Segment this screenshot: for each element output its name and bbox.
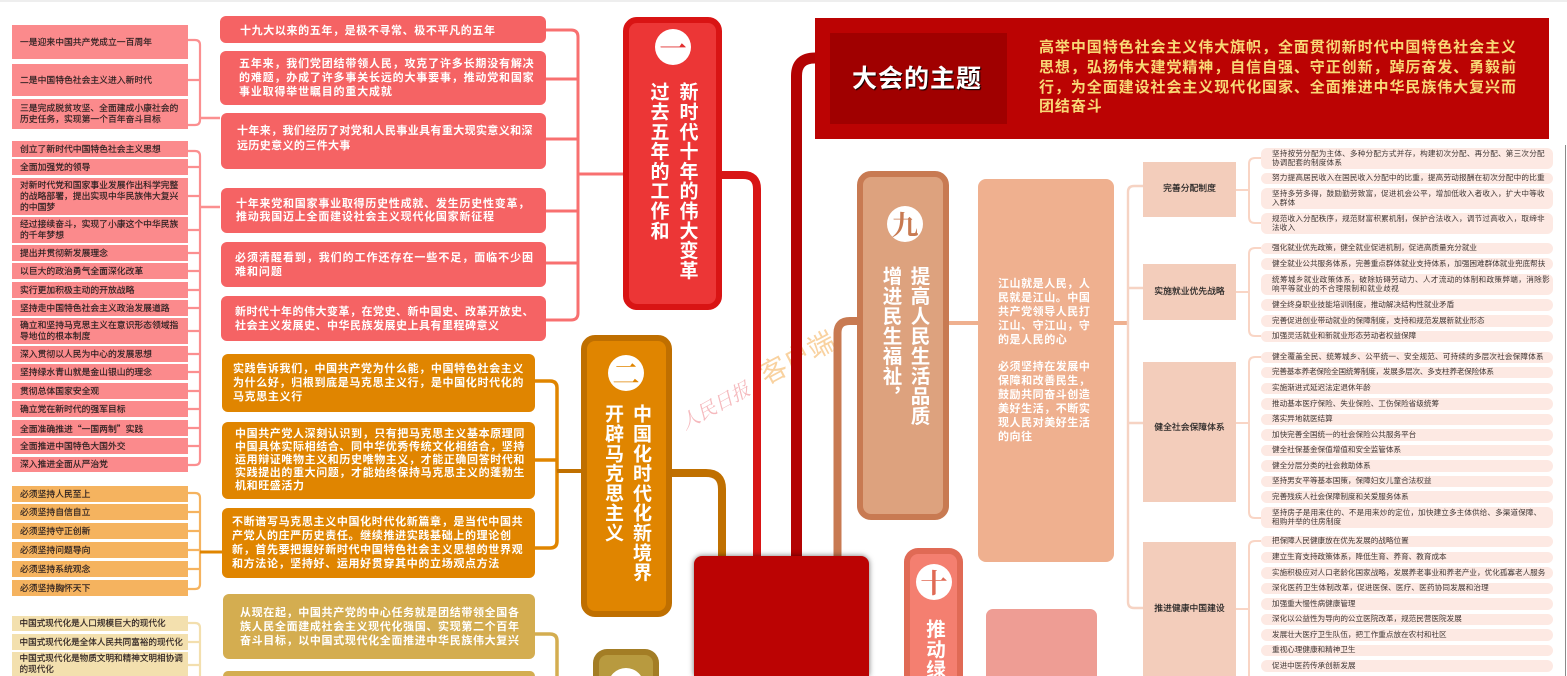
item: 完善基本养老保险全国统筹制度，发展多层次、多支柱养老保险体系 bbox=[1272, 367, 1494, 376]
item bbox=[12, 504, 188, 520]
item bbox=[12, 364, 188, 380]
item bbox=[12, 217, 188, 243]
text block: 运用辩证唯物主义和历史唯物主义，才能正确回答时代和 bbox=[235, 454, 525, 466]
item bbox=[1261, 188, 1553, 209]
item: 二是中国特色社会主义进入新时代 bbox=[20, 74, 152, 84]
icon: numeral ten: 十 bbox=[920, 562, 948, 601]
panel: section nine summary bbox=[978, 179, 1114, 562]
item: 发展壮大医疗卫生队伍，把工作重点放在农村和社区 bbox=[1272, 630, 1447, 639]
text block bbox=[998, 360, 1090, 443]
item: 坚持男女平等基本国策，保障妇女儿童合法权益 bbox=[1272, 476, 1431, 485]
connector: node one to centre bbox=[722, 175, 757, 560]
item: 响平等就业的不合理限制和就业歧视 bbox=[1272, 284, 1399, 292]
item bbox=[12, 159, 188, 175]
text block: 推动我国迈上全面建设社会主义现代化国家新征程 bbox=[236, 210, 495, 222]
text block: 和方法论，坚持好、运用好贯穿其中的立场观点方法 bbox=[232, 558, 500, 570]
item bbox=[1261, 598, 1553, 610]
section title: 增进民生福祉， bbox=[879, 266, 901, 406]
item bbox=[1261, 660, 1553, 672]
item bbox=[12, 64, 188, 96]
item bbox=[1261, 315, 1553, 327]
node: section three bbox=[593, 649, 659, 676]
item: 中国式现代化是物质文明和精神文明相协调 bbox=[20, 653, 183, 663]
list: three major events bbox=[12, 25, 188, 129]
top edge strip bbox=[0, 0, 1567, 2]
list: historic achievements bbox=[12, 141, 188, 472]
item bbox=[1261, 614, 1553, 625]
measure: social security: 健全社会保障体系 bbox=[1154, 422, 1225, 432]
text block: 的向往 bbox=[998, 431, 1033, 443]
item bbox=[1261, 552, 1553, 563]
text block: 共产党领导人民打 bbox=[998, 306, 1090, 318]
item bbox=[12, 401, 188, 417]
list: social security items bbox=[1261, 352, 1553, 528]
item: 加强重大慢性病健康管理 bbox=[1272, 599, 1356, 608]
item: 加快完善全国统一的社会保险公共服务平台 bbox=[1272, 430, 1416, 439]
item: 深化以公益性为导向的公立医院改革，规范民营医院发展 bbox=[1272, 614, 1462, 623]
text block bbox=[220, 51, 546, 105]
text block: 奋斗目标，以中国式现代化全面推进中华民族伟大复兴 bbox=[240, 634, 520, 646]
item: 建立生育支持政策体系，降低生育、养育、教育成本 bbox=[1272, 552, 1447, 561]
text block: 必须坚持在发展中 bbox=[998, 361, 1090, 373]
list: Chinese modernization traits bbox=[12, 616, 188, 676]
item: 实施积极应对人口老龄化国家战略，发展养老事业和养老产业，优化孤寡老人服务 bbox=[1272, 568, 1545, 577]
item: 健全就业公共服务体系，完善重点群体就业支持体系，加强困难群体就业兜底帮扶 bbox=[1272, 259, 1545, 268]
item: 深入贯彻以人民为中心的发展思想 bbox=[20, 348, 152, 358]
watermark: 人民日报 bbox=[675, 374, 756, 435]
item bbox=[12, 457, 188, 472]
list: six principles bbox=[12, 486, 188, 596]
item: 规范收入分配秩序，规范财富积累机制，保护合法收入，调节过高收入，取缔非 bbox=[1272, 214, 1545, 223]
text block: 中国共产党人深刻认识到，只有把马克思主义基本原理同 bbox=[235, 428, 525, 440]
item bbox=[1261, 629, 1553, 641]
item bbox=[1261, 367, 1553, 378]
text block: 必须清醒看到，我们的工作还存在一些不足，面临不少困 bbox=[235, 252, 534, 264]
item: 的战略部署，提出实现中华民族伟大复兴 bbox=[20, 191, 178, 201]
section title: 新时代十年的伟大变革 bbox=[676, 82, 698, 280]
item: 实行更加积极主动的开放战略 bbox=[20, 284, 134, 294]
item bbox=[1261, 583, 1553, 594]
node: section one bbox=[623, 17, 722, 310]
item: 推动基本医疗保险、失业保险、工伤保险省级统筹 bbox=[1272, 399, 1439, 408]
item bbox=[1261, 429, 1553, 441]
list: healthy China items bbox=[1261, 536, 1553, 672]
item: 中国式现代化是全体人民共同富裕的现代化 bbox=[20, 636, 183, 646]
item: 全面推进中国特色大国外交 bbox=[20, 440, 126, 450]
theme text bbox=[1039, 39, 1517, 115]
item bbox=[12, 141, 188, 157]
text block bbox=[998, 278, 1090, 346]
item: 必须坚持自信自立 bbox=[20, 506, 90, 516]
text block: 马克思主义行 bbox=[233, 391, 303, 403]
text block: 鼓励共同奋斗创造 bbox=[998, 389, 1090, 401]
item: 健全社保基金保值增值和安全监管体系 bbox=[1272, 445, 1401, 454]
text block: 的是人民的心 bbox=[998, 334, 1067, 346]
item: 坚持走中国特色社会主义政治发展道路 bbox=[20, 302, 170, 312]
measure: social security bbox=[1143, 362, 1236, 502]
item bbox=[12, 178, 188, 215]
text block bbox=[221, 242, 546, 287]
measure: income distribution bbox=[1143, 162, 1236, 217]
node: section two bbox=[581, 335, 672, 617]
item: 健全终身职业技能培训制度，推动解决结构性就业矛盾 bbox=[1272, 300, 1454, 309]
item: 促进中医药传承创新发展 bbox=[1272, 661, 1356, 670]
item: 完善残疾人社会保障制度和关爱服务体系 bbox=[1272, 492, 1409, 501]
item: 坚持多劳多得，鼓励勤劳致富，促进机会公平，增加低收入者收入，扩大中等收 bbox=[1272, 189, 1545, 198]
connector: first list bracket bbox=[188, 40, 220, 125]
item bbox=[1261, 398, 1553, 410]
theme text: 思想，弘扬伟大建党精神，自信自强、守正创新，踔厉奋发、勇毅前 bbox=[1039, 59, 1517, 76]
panel: section three paragraphs bbox=[223, 594, 535, 676]
item bbox=[12, 245, 188, 261]
connector: section one paragraphs bbox=[546, 30, 623, 320]
item bbox=[12, 561, 188, 577]
text block bbox=[223, 671, 535, 676]
item bbox=[12, 99, 188, 129]
item bbox=[12, 420, 188, 436]
item: 中国式现代化是人口规模巨大的现代化 bbox=[20, 618, 166, 628]
connector: section three paragraphs bbox=[535, 634, 557, 676]
item bbox=[1261, 476, 1553, 487]
item bbox=[1261, 274, 1553, 295]
text block bbox=[222, 508, 535, 578]
item bbox=[12, 318, 188, 344]
text block: 五年来，我们党团结带领人民，攻克了许多长期没有解决 bbox=[239, 58, 534, 70]
text block bbox=[221, 188, 546, 233]
item bbox=[12, 652, 188, 676]
text block: 难和问题 bbox=[235, 266, 283, 278]
item bbox=[12, 438, 188, 454]
item: 确立党在新时代的强军目标 bbox=[20, 404, 126, 414]
watermark bbox=[675, 320, 841, 435]
section title bbox=[648, 82, 698, 280]
item: 租购并举的住房制度 bbox=[1272, 516, 1341, 526]
measure: employment: 实施就业优先战略 bbox=[1154, 286, 1225, 296]
heading block bbox=[830, 33, 1007, 124]
item bbox=[1261, 460, 1553, 472]
text block bbox=[222, 354, 535, 412]
item: 的现代化 bbox=[20, 664, 54, 674]
item bbox=[12, 616, 188, 631]
text block bbox=[222, 422, 535, 499]
item: 一是迎来中国共产党成立一百周年 bbox=[20, 36, 152, 46]
text block: 的难题，办成了许多事关长远的大事要事，推动党和国家 bbox=[239, 72, 534, 84]
item: 经过接续奋斗，实现了小康这个中华民族 bbox=[20, 219, 178, 229]
watermark: 客户端 bbox=[751, 320, 841, 392]
item: 深化医药卫生体制改革，促进医保、医疗、医药协同发展和治理 bbox=[1272, 583, 1489, 592]
item bbox=[12, 282, 188, 298]
item bbox=[1261, 243, 1553, 254]
item bbox=[12, 346, 188, 362]
item: 健全覆盖全民、统筹城乡、公平统一、安全规范、可持续的多层次社会保障体系 bbox=[1272, 352, 1544, 361]
section title: 开辟马克思主义 bbox=[602, 404, 623, 543]
item: 统筹城乡就业政策体系，破除妨碍劳动力、人才流动的体制和政策弊端，消除影 bbox=[1272, 275, 1550, 284]
item: 深入推进全面从严治党 bbox=[20, 459, 108, 469]
measure: income distribution: 完善分配制度 bbox=[1163, 183, 1216, 193]
text block: 江山就是人民，人 bbox=[998, 278, 1090, 290]
icon: numeral one: 一 bbox=[660, 27, 686, 66]
item bbox=[12, 542, 188, 558]
text block: 中国具体实际相结合、同中华优秀传统文化相结合，坚持 bbox=[235, 441, 525, 453]
right edge rule bbox=[1565, 145, 1566, 676]
item bbox=[1261, 383, 1553, 394]
measure: employment bbox=[1143, 264, 1236, 320]
list: income distribution items bbox=[1261, 148, 1553, 234]
item: 三是完成脱贫攻坚、全面建成小康社会的 bbox=[20, 103, 178, 113]
item bbox=[1261, 536, 1553, 547]
central title block bbox=[694, 556, 869, 676]
item bbox=[1261, 213, 1553, 234]
text block: 远历史意义的三件大事 bbox=[237, 140, 351, 152]
section title: 中国化时代化新境界 bbox=[630, 404, 651, 582]
node: section nine bbox=[857, 171, 949, 520]
connector: six principles bracket bbox=[188, 493, 222, 589]
panel: congress theme bbox=[815, 18, 1549, 139]
item bbox=[12, 383, 188, 399]
item: 落实异地就医结算 bbox=[1272, 414, 1333, 423]
text block: 民就是江山。中国 bbox=[998, 292, 1090, 304]
item bbox=[1261, 491, 1553, 503]
text block: 从现在起，中国共产党的中心任务就是团结带领全国各 bbox=[240, 606, 520, 618]
measure: healthy China: 推进健康中国建设 bbox=[1154, 603, 1225, 613]
connector: achievements list bracket bbox=[188, 151, 220, 465]
item: 强化就业优先政策，健全就业促进机制，促进高质量充分就业 bbox=[1272, 243, 1477, 252]
theme text: 行，为全面建设社会主义现代化国家、全面推进中华民族伟大复兴而 bbox=[1039, 79, 1517, 96]
text block: 十九大以来的五年，是极不寻常、极不平凡的五年 bbox=[240, 24, 496, 36]
item bbox=[12, 580, 188, 596]
panel: section two paragraphs bbox=[222, 354, 535, 578]
measure: healthy China bbox=[1143, 542, 1236, 676]
item: 必须坚持系统观念 bbox=[20, 564, 90, 574]
item bbox=[12, 25, 188, 59]
item: 坚持按劳分配为主体、多种分配方式并存，构建初次分配、再分配、第三次分配 bbox=[1272, 149, 1545, 158]
item: 重视心理健康和精神卫生 bbox=[1272, 645, 1356, 654]
item: 贯彻总体国家安全观 bbox=[20, 386, 99, 396]
item: 完善促进创业带动就业的保障制度，支持和规范发展新就业形态 bbox=[1272, 316, 1485, 325]
text block bbox=[221, 296, 546, 341]
item: 对新时代党和国家事业发展作出科学完整 bbox=[20, 180, 178, 190]
connector: node two to centre bbox=[672, 473, 722, 560]
item: 提出并贯彻新发展理念 bbox=[20, 248, 108, 258]
item: 健全分层分类的社会救助体系 bbox=[1272, 461, 1371, 470]
item: 确立和坚持马克思主义在意识形态领域指 bbox=[20, 320, 178, 330]
icon: numeral three bbox=[608, 668, 644, 676]
text block: 实践提出的重大问题，才能始终保持马克思主义的蓬勃生 bbox=[235, 467, 525, 479]
connector: theme to centre bbox=[796, 58, 815, 560]
text block bbox=[221, 113, 546, 169]
icon: numeral two: 二 bbox=[612, 353, 640, 392]
item: 把保障人民健康放在优先发展的战略位置 bbox=[1272, 536, 1409, 545]
text block: 机和旺盛活力 bbox=[235, 480, 305, 492]
list: employment items bbox=[1261, 243, 1553, 342]
item: 的千年梦想 bbox=[20, 230, 64, 240]
item bbox=[1261, 445, 1553, 456]
connector: summary to measures bbox=[1128, 186, 1143, 608]
item bbox=[1261, 645, 1553, 656]
item: 法收入 bbox=[1272, 222, 1295, 232]
section title bbox=[879, 266, 930, 426]
connector: distribution items bbox=[1236, 158, 1261, 223]
item: 必须坚持胸怀天下 bbox=[20, 582, 90, 592]
text block: 十年来，我们经历了对党和人民事业具有重大现实意义和深 bbox=[237, 124, 533, 136]
item: 协调配套的制度体系 bbox=[1272, 158, 1342, 166]
text block: 为什么好，归根到底是马克思主义行，是中国化时代化的 bbox=[233, 377, 524, 389]
text block: 新时代十年的伟大变革，在党史、新中国史、改革开放史、 bbox=[235, 306, 534, 318]
item: 导地位的根本制度 bbox=[20, 331, 90, 341]
text block: 事业取得举世瞩目的重大成就 bbox=[239, 86, 393, 98]
connector: node nine to centre bbox=[838, 321, 857, 560]
section title bbox=[602, 404, 652, 582]
item: 必须坚持守正创新 bbox=[20, 526, 90, 536]
text block: 现人民对美好生活 bbox=[998, 417, 1090, 429]
item: 坚持房子是用来住的、不是用来炒的定位，加快建立多主体供给、多渠道保障、 bbox=[1272, 508, 1541, 517]
text block: 产党人的庄严历史责任。继续推进实践基础上的理论创 bbox=[232, 530, 512, 542]
text block: 十年来党和国家事业取得历史性成就、发生历史性变革， bbox=[236, 198, 530, 210]
item: 实施渐进式延迟法定退休年龄 bbox=[1272, 383, 1371, 392]
text block: 美好生活，不断实 bbox=[998, 403, 1090, 415]
connector: section two paragraphs bbox=[535, 381, 581, 548]
item: 必须坚持问题导向 bbox=[20, 544, 90, 554]
item: 的中国梦 bbox=[20, 202, 55, 212]
item: 创立了新时代中国特色社会主义思想 bbox=[20, 144, 161, 154]
text block: 不断谱写马克思主义中国化时代化新篇章，是当代中国共 bbox=[232, 516, 523, 528]
item: 全面加强党的领导 bbox=[20, 162, 90, 172]
item bbox=[1261, 299, 1553, 311]
item: 历史任务，实现第一个百年奋斗目标 bbox=[20, 114, 161, 124]
item: 必须坚持人民至上 bbox=[20, 488, 90, 498]
connector: health items bbox=[1236, 541, 1261, 676]
connector: social security items bbox=[1236, 357, 1261, 518]
item: 坚持绿水青山就是金山银山的理念 bbox=[20, 366, 152, 376]
connector: node nine to summary bbox=[949, 321, 1128, 325]
text block bbox=[223, 594, 535, 659]
item: 努力提高居民收入在国民收入分配中的比重，提高劳动报酬在初次分配中的比重 bbox=[1272, 173, 1545, 182]
text block: 社会主义发展史、中华民族发展史上具有里程碑意义 bbox=[235, 320, 500, 332]
connector: employment items bbox=[1236, 248, 1261, 336]
text block: 保障和改善民生， bbox=[998, 375, 1090, 387]
item bbox=[12, 300, 188, 316]
section title: 提高人民生活品质 bbox=[907, 266, 929, 426]
text block bbox=[220, 16, 546, 43]
text block: 新，首先要把握好新时代中国特色社会主义思想的世界观 bbox=[232, 544, 523, 556]
item: 加强灵活就业和新就业形态劳动者权益保障 bbox=[1272, 331, 1416, 340]
item: 入群体 bbox=[1272, 198, 1295, 206]
theme text: 高举中国特色社会主义伟大旗帜，全面贯彻新时代中国特色社会主义 bbox=[1039, 39, 1517, 56]
item bbox=[1261, 414, 1553, 425]
node: section ten bbox=[904, 548, 963, 676]
item bbox=[12, 523, 188, 539]
theme text: 团结奋斗 bbox=[1039, 98, 1103, 115]
panel: section one paragraphs bbox=[220, 16, 546, 341]
item bbox=[12, 263, 188, 279]
icon: numeral nine: 九 bbox=[892, 204, 918, 243]
item bbox=[1261, 148, 1553, 169]
item bbox=[1261, 507, 1553, 528]
text block: 族人民全面建成社会主义现代化强国、实现第二个百年 bbox=[240, 620, 520, 632]
section title: 过去五年的工作和 bbox=[648, 82, 668, 240]
panel: section ten summary bbox=[986, 609, 1097, 676]
item bbox=[12, 634, 188, 650]
heading block: 大会的主题 bbox=[852, 65, 982, 93]
text block: 实践告诉我们，中国共产党为什么能，中国特色社会主义 bbox=[233, 363, 524, 375]
item: 以巨大的政治勇气全面深化改革 bbox=[20, 266, 143, 276]
text block: 江山、守江山，守 bbox=[998, 320, 1090, 332]
connector: modernization list bracket bbox=[188, 623, 200, 676]
item: 全面准确推进“一国两制”实践 bbox=[20, 422, 143, 434]
item bbox=[1261, 331, 1553, 342]
item bbox=[12, 486, 188, 502]
